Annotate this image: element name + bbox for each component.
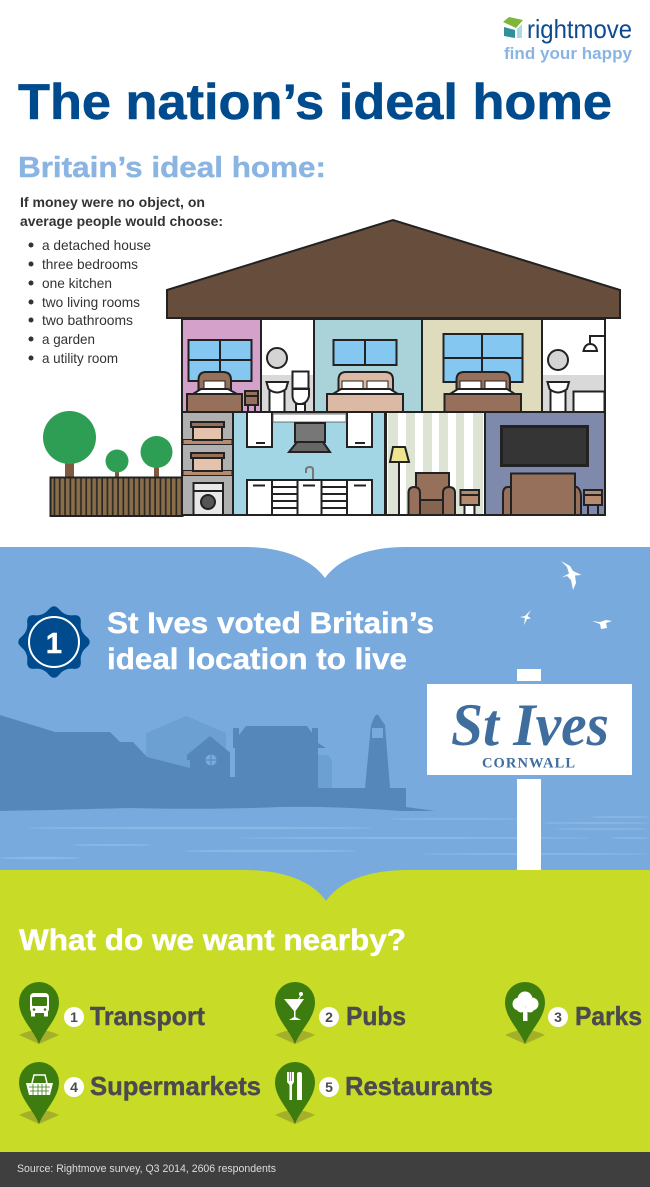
logo: rightmove bbox=[503, 14, 633, 63]
footer bar: source: Source: Rightmove survey, Q3 2014, 2606 respondents bbox=[17, 1163, 276, 1175]
list of ideal home features: two bathrooms bbox=[42, 312, 133, 328]
sign: St Ives Cornwall: CORNWALL bbox=[482, 756, 575, 772]
list of ideal home features: a garden bbox=[42, 331, 95, 347]
item 4: supermarkets: Supermarkets bbox=[90, 1071, 261, 1101]
house bbox=[167, 220, 620, 515]
item 3: parks bbox=[505, 982, 642, 1044]
room: pink bedroom bbox=[182, 319, 261, 412]
heading: Britain's ideal home: Britain’s ideal home: bbox=[18, 152, 326, 184]
item 2: pubs: 2 bbox=[325, 1009, 333, 1025]
item 1: transport bbox=[19, 982, 205, 1044]
item 2: pubs: Pubs bbox=[346, 1001, 406, 1031]
item 3: parks: Parks bbox=[575, 1001, 642, 1031]
item 5: restaurants: 5 bbox=[325, 1079, 333, 1095]
panel: St Ives background bbox=[0, 547, 650, 910]
room: beige bedroom bbox=[422, 319, 542, 412]
intro text: If money were no object, on bbox=[20, 194, 205, 210]
heading: St Ives voted: ideal location to live bbox=[107, 643, 407, 676]
badge: number 1: 1 bbox=[46, 628, 62, 660]
item 5: restaurants: Restaurants bbox=[345, 1071, 493, 1101]
item 3: parks: 3 bbox=[554, 1009, 562, 1025]
room: bathroom two bbox=[542, 319, 605, 412]
item 1: transport: Transport bbox=[90, 1001, 205, 1031]
garden: trees and fence bbox=[43, 411, 182, 516]
list of ideal home features: two living rooms bbox=[42, 294, 140, 310]
panel: what do we want nearby bbox=[0, 870, 650, 1152]
heading: St Ives voted: St Ives voted Britain’s bbox=[107, 607, 434, 640]
item 2: pubs bbox=[275, 982, 406, 1044]
heading: What do we want nearby: What do we want nearby? bbox=[19, 924, 406, 957]
title: The nation’s ideal home bbox=[18, 74, 612, 130]
roof bbox=[167, 220, 620, 318]
list of ideal home features: a utility room bbox=[42, 350, 118, 366]
room: lounge with TV bbox=[485, 412, 605, 515]
list of ideal home features: three bedrooms bbox=[42, 256, 138, 272]
item 4: supermarkets bbox=[19, 1062, 261, 1124]
sign: St Ives Cornwall: St Ives bbox=[451, 692, 609, 758]
sea ripples bbox=[0, 816, 650, 859]
intro text: average people would choose: bbox=[20, 213, 223, 229]
footer bar: source bbox=[0, 1152, 650, 1187]
list of ideal home features: one kitchen bbox=[42, 275, 112, 291]
item 5: restaurants bbox=[275, 1062, 493, 1124]
room: bathroom one bbox=[261, 319, 314, 412]
coastline silhouette bbox=[0, 714, 435, 811]
item 1: transport: 1 bbox=[70, 1009, 78, 1025]
badge: number 1 bbox=[18, 606, 90, 678]
room: utility bbox=[182, 412, 233, 515]
item 4: supermarkets: 4 bbox=[70, 1079, 78, 1095]
birds bbox=[520, 561, 612, 629]
list of ideal home features: a detached house bbox=[42, 237, 151, 253]
room: striped living room bbox=[386, 412, 485, 515]
logo: rightmove: rightmove bbox=[527, 14, 632, 44]
room: kitchen bbox=[233, 412, 385, 515]
sign: St Ives Cornwall bbox=[427, 669, 632, 871]
room: teal bedroom bbox=[314, 319, 422, 412]
logo: rightmove: find your happy bbox=[504, 44, 633, 63]
list of ideal home features bbox=[28, 237, 151, 366]
